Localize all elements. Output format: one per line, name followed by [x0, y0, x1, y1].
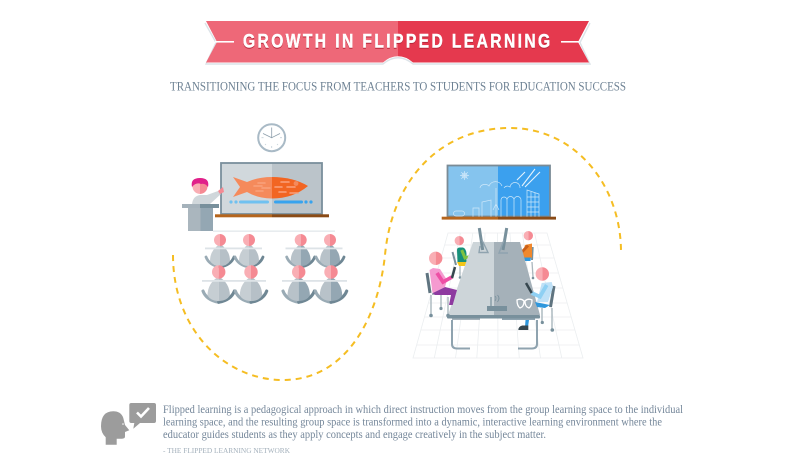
quote paragraph — [163, 404, 683, 441]
icon: speaking head with check bubble — [101, 403, 156, 445]
icon: wifi router — [487, 295, 507, 311]
dashed path connecting the classrooms — [173, 128, 621, 380]
subtitle: TRANSITIONING THE FOCUS FROM TEACHERS TO STUDENTS FOR EDUCATION SUCCESS — [170, 80, 626, 94]
interactive window screen with city — [448, 166, 550, 217]
icon: wall clock — [258, 124, 285, 151]
icon: glasses — [517, 299, 532, 308]
students: back row — [205, 234, 344, 267]
quote paragraph: educator guides students as they apply concepts and engage creatively in the subject matter. — [163, 429, 546, 441]
icon: fish — [233, 177, 308, 198]
students: front row — [202, 265, 347, 302]
flipped classroom scene — [413, 166, 583, 358]
student: front left — [427, 252, 457, 317]
quote paragraph: Flipped learning is a pedagogical approach in which direct instruction moves from the group learning space to the individual — [163, 404, 683, 416]
conference table — [447, 242, 540, 348]
speaking head — [101, 411, 129, 445]
student: back left — [452, 236, 476, 279]
floor line — [213, 230, 335, 232]
window ledge — [442, 217, 556, 220]
student: front right — [518, 267, 554, 332]
student: back right — [511, 231, 534, 279]
blackboard with fish diagram — [221, 163, 322, 214]
speech bubble with check — [129, 403, 156, 429]
teacher at podium — [182, 178, 224, 231]
floor grid — [413, 233, 583, 358]
banner title text: GROWTH IN FLIPPED LEARNING — [243, 30, 550, 52]
title banner — [205, 21, 590, 64]
board caption lines — [229, 200, 313, 204]
traditional classroom scene — [182, 124, 347, 302]
chalk shelf — [215, 214, 329, 217]
quote paragraph: learning space, and the resulting group space is transformed into a dynamic, interactive learning environment where the — [163, 416, 662, 428]
monitors — [479, 228, 508, 253]
attribution: - THE FLIPPED LEARNING NETWORK — [163, 446, 291, 455]
